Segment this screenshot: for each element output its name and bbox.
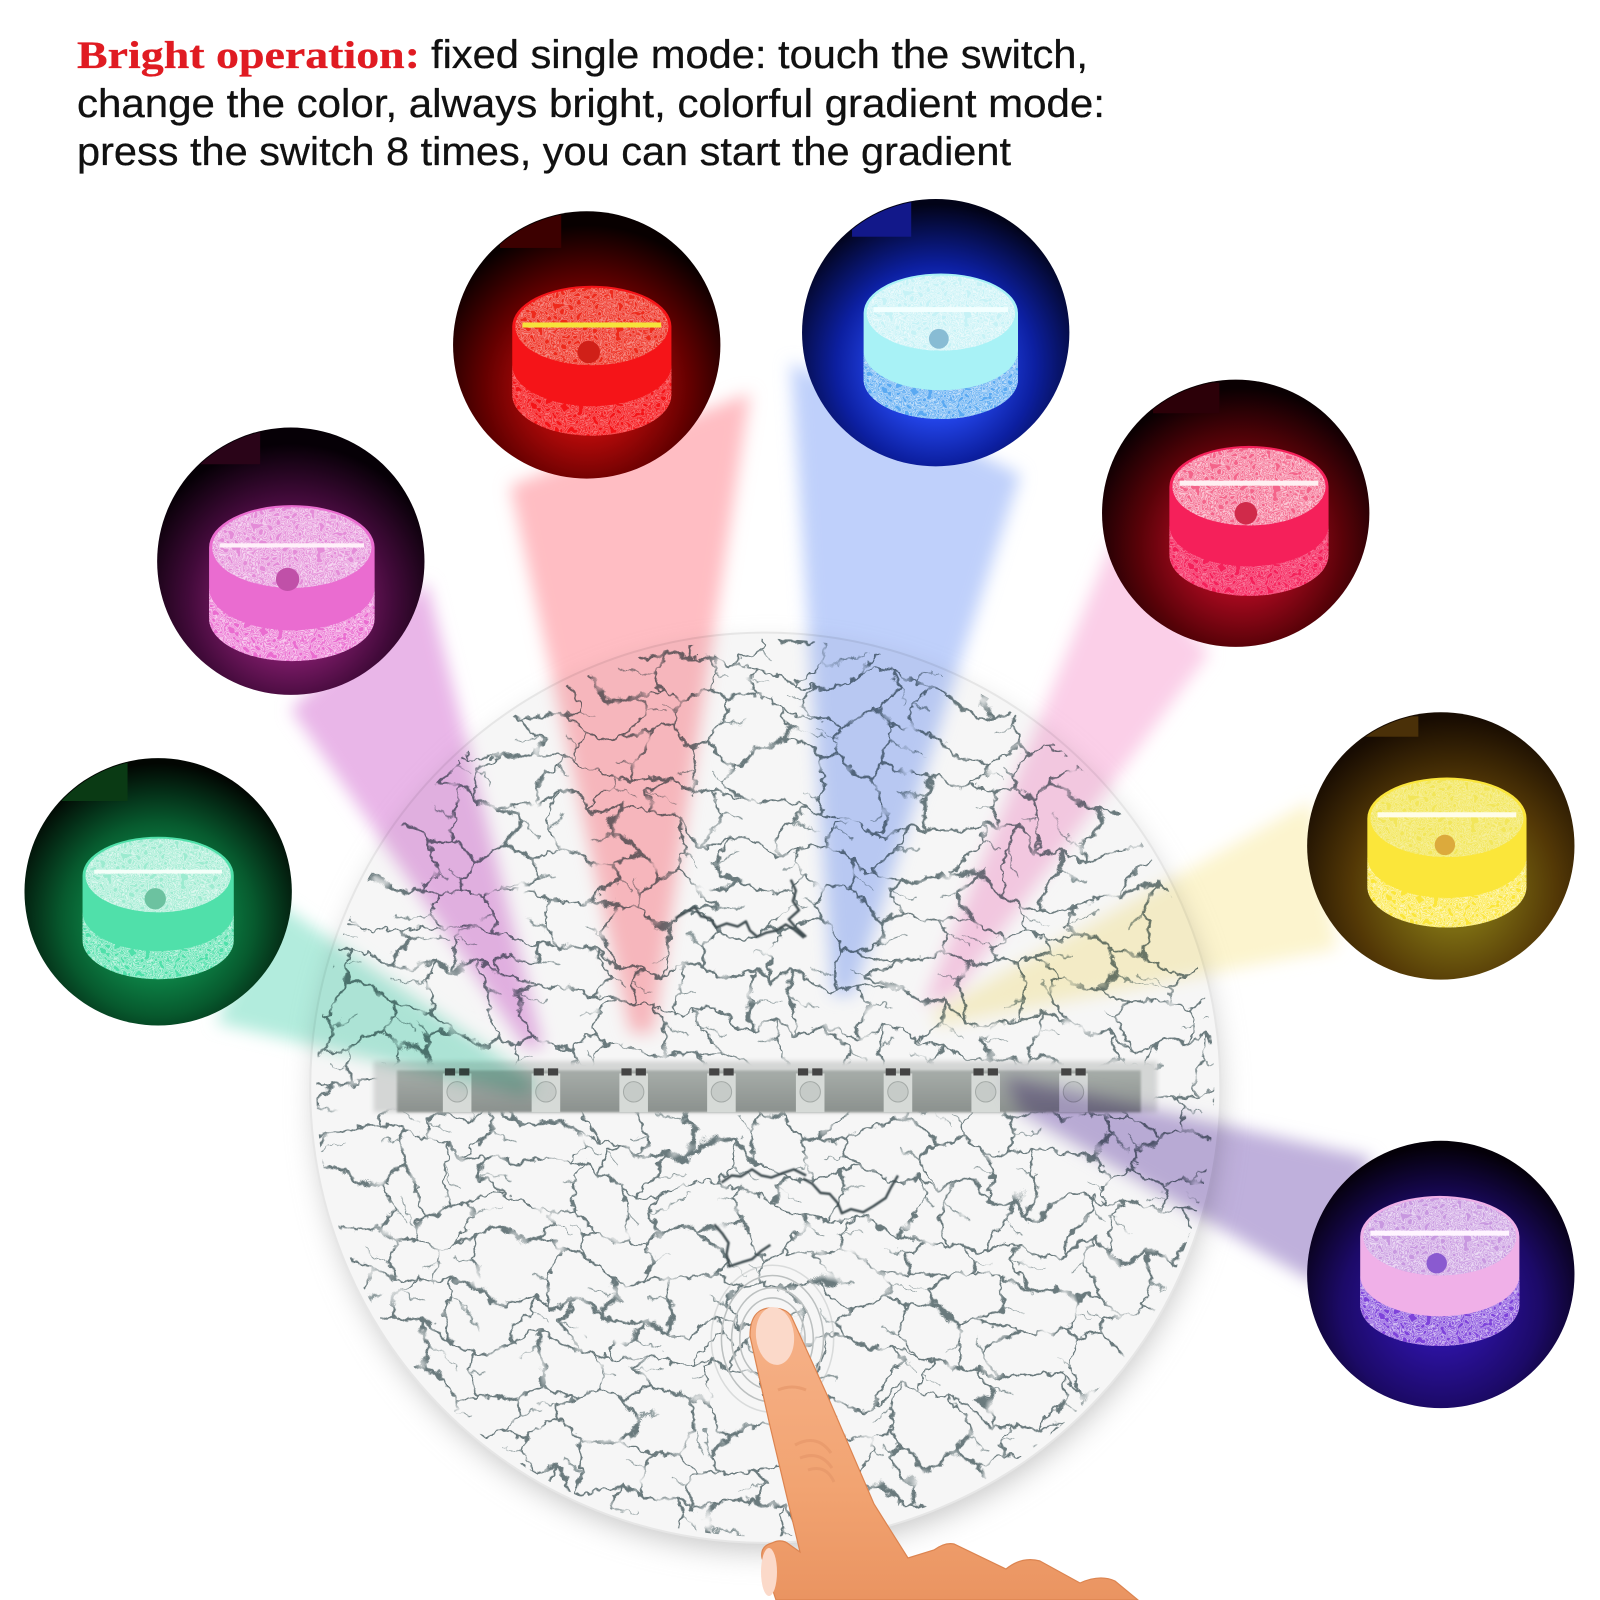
LED lenses xyxy=(447,1082,1084,1102)
panel: crackled lamp base disc xyxy=(296,612,1235,1551)
crack texture xyxy=(296,612,1235,1551)
lamp base red xyxy=(512,286,671,436)
icon: pointing hand xyxy=(750,1305,1138,1600)
beam: red xyxy=(510,393,750,1033)
text line 2: change the color, always bright, colorful gradient mode: xyxy=(77,82,1105,126)
instruction text xyxy=(77,33,1105,174)
beam: blue xyxy=(791,362,1020,995)
lamp base purple xyxy=(1360,1196,1519,1346)
beam: purple xyxy=(1005,1077,1372,1284)
lamp: purple xyxy=(1307,1141,1574,1408)
text line 1: fixed single mode: touch the switch, xyxy=(431,33,1088,77)
beam: green xyxy=(216,900,536,1096)
text line 3: press the switch 8 times, you can start the gradient xyxy=(77,130,1011,174)
beam: magenta xyxy=(291,582,543,1049)
lamp base yellow xyxy=(1367,778,1527,928)
LED contacts xyxy=(445,1068,1086,1076)
corner patch yellow xyxy=(1362,716,1418,737)
lamp: blue xyxy=(802,199,1069,466)
lamp base green xyxy=(83,837,234,979)
lamp: pink red xyxy=(1102,380,1369,647)
lamp base blue xyxy=(864,273,1018,419)
finger nail xyxy=(753,1305,797,1367)
corner patch green xyxy=(61,760,128,801)
beam: pink xyxy=(923,541,1209,1005)
beam: yellow xyxy=(934,801,1337,1026)
lamp: red xyxy=(453,209,720,479)
lamp: yellow xyxy=(1307,712,1574,980)
corner patch blue xyxy=(852,201,911,237)
main dark cracks xyxy=(676,880,898,1266)
lamp base magenta xyxy=(209,505,375,661)
colored light beams xyxy=(216,362,1372,1284)
lamp: magenta xyxy=(157,428,424,695)
lamp: green xyxy=(24,758,292,1026)
corner patch magenta xyxy=(200,432,260,464)
corner patch pink red xyxy=(1153,383,1219,413)
disc shadow xyxy=(316,649,1218,1551)
lamp base pink red xyxy=(1169,446,1329,596)
touch switch rings xyxy=(711,1265,834,1412)
finger creases xyxy=(778,1387,834,1482)
thumb nail xyxy=(761,1548,777,1596)
red heading label: Bright operation: xyxy=(77,33,420,77)
LED slot xyxy=(373,1061,1157,1112)
corner patch red xyxy=(500,214,562,248)
LED chips xyxy=(443,1073,1088,1112)
